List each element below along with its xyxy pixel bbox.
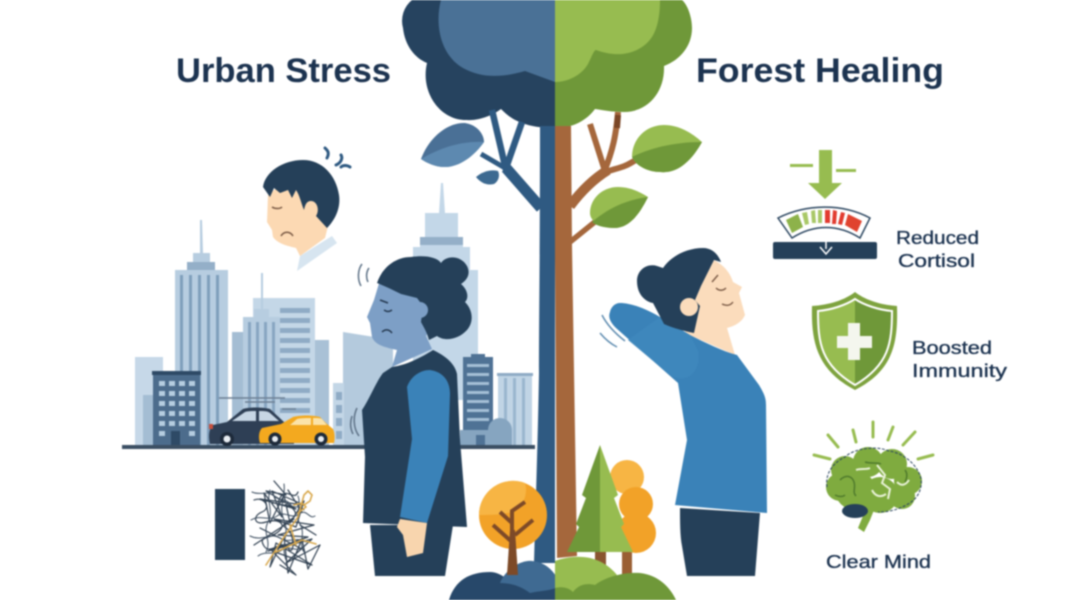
raised upper arm highlight (628, 317, 699, 378)
dark blue building right (463, 354, 493, 445)
pine tree (567, 445, 633, 573)
label: Reduced Cortisol (896, 227, 979, 271)
autumn tree left (479, 481, 547, 575)
icon: immunity shield (812, 292, 897, 390)
bushes at tree base (449, 557, 676, 600)
cars (209, 398, 335, 446)
label: Reduced Cortisol: Reduced (896, 227, 979, 248)
stretching woman (600, 248, 767, 576)
right tall tower (413, 183, 478, 400)
ear (412, 302, 428, 318)
shirt (609, 303, 767, 513)
gauge arc (778, 207, 870, 238)
icon: reduced cortisol gauge (773, 150, 877, 259)
yellow taxi (259, 416, 335, 446)
tree (402, 0, 702, 563)
canopy: green half (555, 0, 692, 128)
neck and face (685, 258, 745, 355)
ground line (122, 445, 535, 449)
pants (370, 525, 453, 576)
blue leaf small (476, 170, 499, 185)
ear (680, 298, 698, 316)
label: Boosted Immunity: Immunity (912, 360, 1008, 381)
label: Boosted Immunity: Boosted (912, 337, 992, 358)
canopy: blue half (402, 0, 555, 128)
office block (243, 273, 315, 445)
stressed woman (351, 256, 472, 576)
blue trunk and branches (421, 110, 555, 563)
green leaf lower (590, 187, 648, 228)
green leaf upper (632, 125, 702, 172)
brown trunk and branches (555, 112, 702, 558)
label: Clear Mind: Clear Mind (826, 551, 931, 572)
black car (209, 408, 294, 446)
stress marks (351, 264, 369, 436)
neck and face (367, 280, 436, 367)
black rectangle (215, 489, 245, 560)
pale building (497, 373, 533, 445)
city skyline (135, 183, 533, 445)
icon: clear mind brain (814, 422, 933, 532)
dark base (773, 242, 877, 259)
tangled scribble (250, 481, 320, 575)
blue leaf large (421, 123, 484, 167)
tall tower left (175, 220, 228, 445)
title: Urban Stress: Urban Stress (176, 52, 391, 90)
down arrow (790, 150, 856, 199)
title: Forest Healing: Forest Healing (696, 52, 944, 90)
pants (680, 508, 760, 576)
vest (362, 350, 467, 527)
hair (377, 256, 472, 340)
label: Boosted Immunity (912, 337, 1008, 381)
hand (397, 519, 427, 557)
orange tree right (610, 460, 656, 574)
worried man head (263, 148, 350, 271)
label: Reduced Cortisol: Cortisol (898, 250, 975, 271)
hair (637, 248, 721, 333)
blue sleeve (400, 370, 450, 523)
dark office (152, 371, 201, 445)
